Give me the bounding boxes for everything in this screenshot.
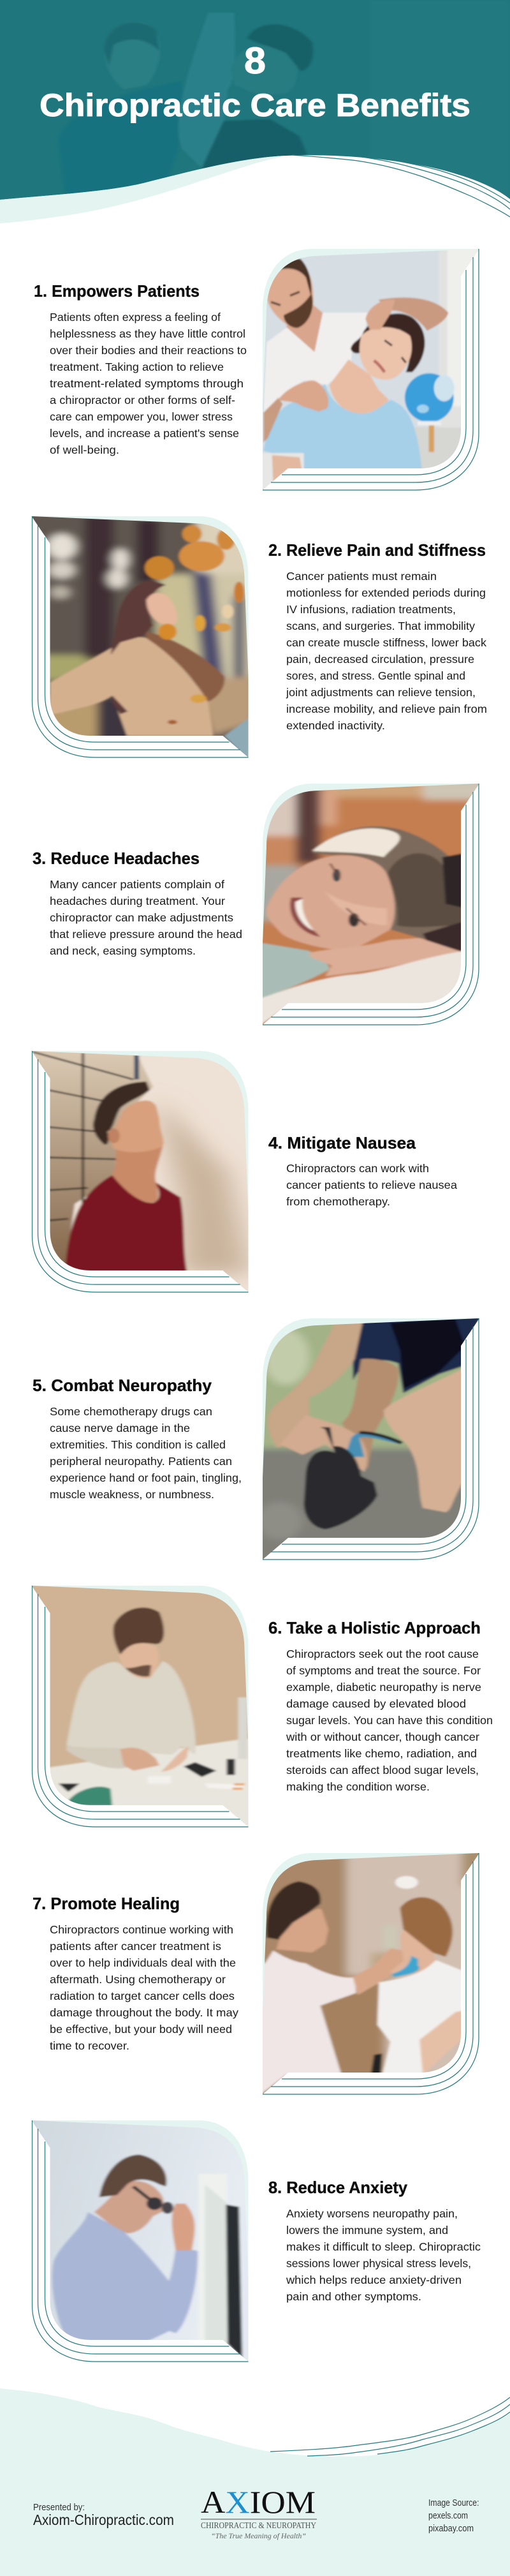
header banner <box>0 0 510 234</box>
accent lines 1 <box>263 249 479 490</box>
accent lines 8 <box>32 2120 249 2362</box>
body text 4: from chemotherapy. <box>286 1195 390 1208</box>
body text 8: pain and other symptoms. <box>286 2290 421 2303</box>
accent lines 4 <box>32 1051 249 1292</box>
body text 1: care can empower you, lower stress <box>50 410 233 423</box>
body text 6: steroids can affect blood sugar levels, <box>286 1764 479 1776</box>
panel: 3. Reduce Headaches <box>33 784 479 1025</box>
body text 7: radiation to target cancer cells does <box>50 1990 235 2002</box>
body text 7: aftermath. Using chemotherapy or <box>50 1973 226 1986</box>
panel: 7. Promote Healing <box>33 1853 479 2095</box>
body text 2: motionless for extended periods during <box>286 586 486 599</box>
logo: Axiom Chiropractic and Neuropathy: “The True Meaning of Health” <box>211 2531 306 2540</box>
body text 6: damage caused by elevated blood <box>286 1697 466 1710</box>
accent lines 5 <box>263 1318 479 1560</box>
panel: 5. Combat Neuropathy <box>33 1318 479 1560</box>
body text 7: Chiropractors continue working with <box>50 1923 233 1936</box>
body text 1 <box>50 311 247 456</box>
body text 1: treatment. Taking action to relieve <box>50 361 224 373</box>
body text 3: chiropractor can make adjustments <box>50 911 233 924</box>
body text 7: be effective, but your body will need <box>50 2023 232 2036</box>
body text 2: joint adjustments can relieve tension, <box>286 686 476 699</box>
panel: 1. Empowers Patients <box>34 249 479 491</box>
photo card 3: smiling woman resting head <box>263 784 479 1025</box>
presented by: Presented by: <box>33 2502 85 2513</box>
panel: 2. Relieve Pain and Stiffness <box>32 516 486 758</box>
presented by: Axiom-Chiropractic.com <box>33 2512 174 2528</box>
body text 1: helplessness as they have little control <box>50 327 245 340</box>
photo card 2: woman among autumn leaves <box>32 516 249 757</box>
body text 5: muscle weakness, or numbness. <box>50 1488 214 1501</box>
body text 2: IV infusions, radiation treatments, <box>286 603 456 616</box>
heading 2: 2. Relieve Pain and Stiffness <box>268 540 486 560</box>
heading 5: 5. Combat Neuropathy <box>33 1376 212 1395</box>
body text 5: extremities. This condition is called <box>50 1438 226 1451</box>
heading 8: 8. Reduce Anxiety <box>268 2178 408 2197</box>
heading 6: 6. Take a Holistic Approach <box>268 1618 481 1637</box>
panel: 8. Reduce Anxiety <box>32 2120 481 2362</box>
accent lines 7 <box>263 1853 479 2094</box>
body text 5: experience hand or foot pain, tingling, <box>50 1471 242 1484</box>
body text 5: Some chemotherapy drugs can <box>50 1405 212 1418</box>
white wave <box>0 155 510 230</box>
body text 8: lowers the immune system, and <box>286 2224 448 2237</box>
image sources: pexels.com <box>428 2510 468 2521</box>
accent lines 2 <box>32 516 249 757</box>
body text 7: damage throughout the body. It may <box>50 2006 238 2019</box>
logo: Axiom Chiropractic and Neuropathy <box>201 2484 317 2540</box>
heading 7: 7. Promote Healing <box>33 1894 180 1913</box>
body text 4: cancer patients to relieve nausea <box>286 1179 457 1191</box>
body text 6: with or without cancer, though cancer <box>286 1731 479 1743</box>
footer wave strokes <box>270 2397 510 2456</box>
panel: 4. Mitigate Nausea <box>32 1051 458 1293</box>
body text 5: peripheral neuropathy. Patients can <box>50 1455 232 1468</box>
title: 8 <box>244 40 266 82</box>
body text 7: patients after cancer treatment is <box>50 1940 221 1953</box>
image sources <box>428 2498 479 2534</box>
body text 7: over to help individuals deal with the <box>50 1956 236 1969</box>
body text 2: scans, and surgeries. That immobility <box>286 620 475 632</box>
header background photo <box>59 13 314 194</box>
body text 3 <box>50 878 242 957</box>
body text 1: over their bodies and their reactions to <box>50 344 247 357</box>
body text 7 <box>50 1923 238 2052</box>
body text 4: Chiropractors can work with <box>286 1162 429 1175</box>
body text 2: increase mobility, and relieve pain from <box>286 703 487 715</box>
body text 5 <box>50 1405 242 1501</box>
body text 2: can create muscle stiffness, lower back <box>286 636 486 649</box>
body text 1: Patients often express a feeling of <box>50 311 221 324</box>
body text 6: example, diabetic neuropathy is nerve <box>286 1681 481 1694</box>
body text 8: which helps reduce anxiety-driven <box>286 2274 462 2286</box>
body text 2: Cancer patients must remain <box>286 570 437 583</box>
body text 3: and neck, easing symptoms. <box>50 944 196 957</box>
body text 1: levels, and increase a patient's sense <box>50 427 239 440</box>
body text 8: sessions lower physical stress levels, <box>286 2257 471 2270</box>
body text 6: sugar levels. You can have this condition <box>286 1714 493 1727</box>
body text 6: making the condition worse. <box>286 1780 430 1793</box>
photo card 5: bare feet and climbing shoe <box>263 1318 479 1560</box>
body text 8: makes it difficult to sleep. Chiropractic <box>286 2240 481 2253</box>
body text 2 <box>286 570 487 732</box>
body text 6: treatments like chemo, radiation, and <box>286 1747 477 1760</box>
body text 8: Anxiety worsens neuropathy pain, <box>286 2207 458 2220</box>
pale teal wave band <box>0 156 286 223</box>
heading 4: 4. Mitigate Nausea <box>268 1133 416 1152</box>
photo card 1: chiropractor adjusting neck <box>263 249 479 490</box>
body text 4 <box>286 1162 457 1208</box>
footer band <box>0 2388 510 2576</box>
photo card 7: therapist taping patient neck <box>263 1853 479 2094</box>
accent lines 6 <box>32 1586 249 1827</box>
body text 1: of well-being. <box>50 443 119 456</box>
body text 6: of symptoms and treat the source. For <box>286 1664 481 1677</box>
body text 7: time to recover. <box>50 2039 129 2052</box>
accent lines 3 <box>263 784 479 1025</box>
photo card 4: man leaning head on wall <box>32 1051 249 1292</box>
body text 2: extended inactivity. <box>286 719 385 732</box>
panel: 6. Take a Holistic Approach <box>32 1586 492 1828</box>
heading 1: 1. Empowers Patients <box>34 281 200 301</box>
image sources: Image Source: <box>428 2498 479 2508</box>
body text 1: treatment-related symptoms through <box>50 377 244 390</box>
body text 2: sores, and stress. Gentle spinal and <box>286 669 465 682</box>
photo card 8: stressed man holding glasses <box>32 2120 249 2361</box>
presented by <box>33 2502 174 2528</box>
body text 2: pain, decreased circulation, pressure <box>286 653 474 666</box>
body text 6: Chiropractors seek out the root cause <box>286 1648 479 1660</box>
body text 1: a chiropractor or other forms of self- <box>50 394 235 406</box>
body text 8 <box>286 2207 481 2303</box>
title <box>40 40 470 123</box>
body text 3: headaches during treatment. Your <box>50 895 225 907</box>
body text 5: cause nerve damage in the <box>50 1422 190 1434</box>
image sources: pixabay.com <box>428 2523 474 2534</box>
photo card 6: man testing blood sugar <box>32 1586 249 1826</box>
heading 3: 3. Reduce Headaches <box>33 849 200 868</box>
body text 3: Many cancer patients complain of <box>50 878 224 891</box>
title: Chiropractic Care Benefits <box>40 87 470 123</box>
body text 6 <box>286 1648 493 1793</box>
logo: Axiom Chiropractic and Neuropathy: CHIROPRACTIC & NEUROPATHY <box>201 2520 316 2530</box>
body text 3: that relieve pressure around the head <box>50 928 242 941</box>
logo: Axiom Chiropractic and Neuropathy: AXIOM <box>201 2484 316 2520</box>
wave outline strokes <box>293 155 510 217</box>
